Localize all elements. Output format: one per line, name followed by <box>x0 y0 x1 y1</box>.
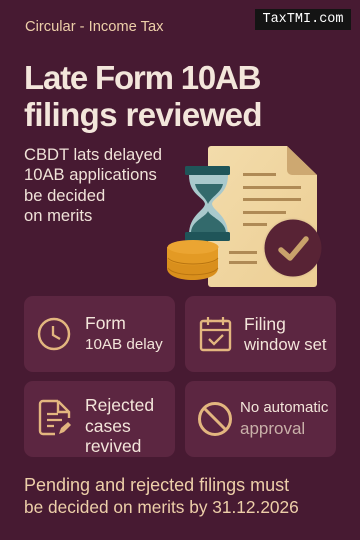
intro text <box>24 145 162 225</box>
panel: form delay <box>24 296 175 372</box>
panel: rejected cases <box>24 381 175 457</box>
intro text: CBDT lats delayed <box>24 145 162 164</box>
label: Rejected <box>85 395 154 415</box>
icon: hourglass <box>185 166 230 241</box>
panel: filing window <box>185 296 336 372</box>
label: Form <box>85 313 126 333</box>
icon: document <box>208 146 317 287</box>
illustration: document, hourglass, coins and check <box>167 146 322 287</box>
label: Filing <box>244 314 286 334</box>
category label: Circular - Income Tax <box>25 19 163 35</box>
intro text: on merits <box>24 206 92 225</box>
intro text: be decided <box>24 186 105 205</box>
label <box>240 399 328 438</box>
label: 10AB delay <box>85 336 163 353</box>
icon: coins <box>167 240 218 280</box>
icon: calendar check <box>200 317 232 352</box>
label: approval <box>240 419 305 438</box>
title: filings reviewed <box>24 96 262 133</box>
watermark: TaxTMI.com <box>262 12 344 27</box>
title: Late Form 10AB <box>24 59 260 96</box>
title <box>24 59 262 133</box>
panel: no automatic approval <box>185 381 336 457</box>
label: revived <box>85 436 141 456</box>
footer takeaway <box>24 475 299 517</box>
watermark <box>255 9 351 30</box>
icon: document edit <box>38 400 71 436</box>
label: No automatic <box>240 399 328 416</box>
footer takeaway: Pending and rejected filings must <box>24 475 289 495</box>
label <box>85 313 163 353</box>
label <box>244 314 327 354</box>
icon: check badge <box>262 217 324 279</box>
icon: prohibited <box>198 402 232 436</box>
intro text: 10AB applications <box>24 165 157 184</box>
footer takeaway: be decided on merits by 31.12.2026 <box>24 497 299 517</box>
icon: clock <box>38 318 70 350</box>
label: window set <box>244 335 327 354</box>
label <box>85 395 154 456</box>
label: cases <box>85 416 131 436</box>
